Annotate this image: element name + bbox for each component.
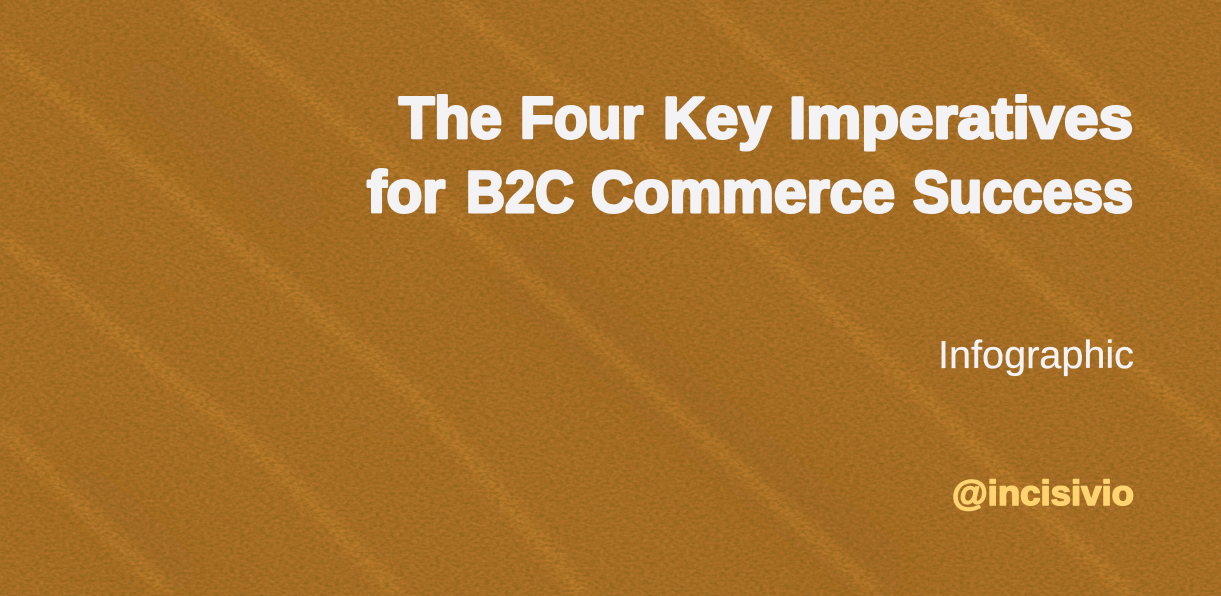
title: Four	[520, 86, 643, 151]
title: for	[367, 160, 445, 225]
title	[367, 86, 1133, 225]
title: Commerce	[591, 160, 895, 225]
handle: @incisivio	[952, 474, 1134, 513]
title: B2C	[466, 160, 574, 225]
title: Key	[663, 86, 771, 151]
subtitle: Infographic	[938, 334, 1134, 377]
title: Success	[913, 160, 1133, 225]
title: The	[399, 86, 502, 151]
title: Imperatives	[789, 86, 1133, 151]
